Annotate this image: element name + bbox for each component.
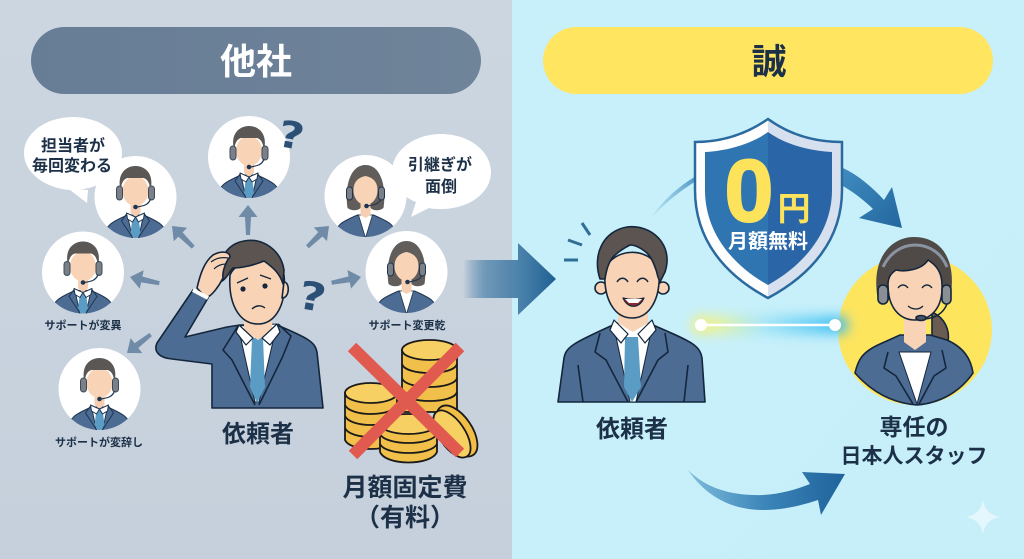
arrow: to upper-right agent	[301, 219, 336, 254]
arrow: to upper-left agent	[165, 219, 200, 254]
icon: joy marks	[564, 223, 590, 260]
label: dedicated Japanese staff	[840, 414, 988, 468]
label: client right: 依頼者	[596, 416, 668, 443]
icon: question mark top: ?	[275, 112, 308, 159]
icon: yellow circle behind staff	[838, 255, 992, 405]
speech bubble: staff changes every time	[24, 117, 122, 203]
panel: Makoto background	[512, 0, 1024, 559]
labels: small agent captions: サポートが変辞し	[55, 435, 143, 449]
arrow: upper right to staff	[843, 168, 902, 228]
icon: shield zero yen	[695, 119, 842, 298]
icon: agent with left bubble	[94, 156, 176, 241]
icon: agent lower left	[58, 348, 140, 433]
speech bubble: staff changes every time: 担当者が	[41, 136, 105, 155]
label: client left: 依頼者	[222, 421, 294, 448]
icon: question mark middle: ?	[295, 273, 329, 322]
speech bubble: handover is a hassle: 面倒	[425, 177, 457, 196]
icon: agent left	[42, 232, 124, 316]
illustration: dedicated staff	[855, 237, 973, 405]
speech bubble: handover is a hassle: 引継ぎが	[408, 155, 472, 174]
arrow: to top agent	[238, 205, 258, 235]
arrow: lower curved to staff	[688, 470, 845, 515]
connection: glowing line	[692, 316, 848, 334]
arrow: upper thin arc	[652, 176, 696, 217]
icon: coin stacks crossed out	[345, 340, 486, 464]
heading: Makoto	[543, 27, 993, 94]
icon: shield zero yen: 0	[725, 141, 773, 240]
speech bubble: staff changes every time: 毎回変わる	[32, 156, 112, 175]
arrow: to right agent	[330, 268, 363, 292]
illustration: worried client	[156, 240, 323, 408]
icon: female agent top right	[324, 155, 406, 240]
icon: sparkle	[966, 500, 1000, 534]
label: monthly fixed fee: 月額固定費	[342, 474, 468, 502]
heading: Makoto: 誠	[751, 43, 787, 82]
label: dedicated Japanese staff: 日本人スタッフ	[840, 445, 988, 468]
arrow: to left agent	[128, 268, 161, 293]
labels: small agent captions: サポート変更乾	[368, 318, 446, 332]
icon: shield zero yen: 円	[778, 190, 810, 227]
arrow: to lower-left agent	[121, 327, 156, 360]
heading: competitors: 他社	[220, 41, 292, 82]
labels: small agent captions	[44, 318, 446, 449]
speech bubble: handover is a hassle	[392, 134, 491, 217]
label: monthly fixed fee: （有料）	[355, 504, 455, 532]
label: monthly fixed fee	[342, 474, 468, 532]
icon: female agent right	[366, 231, 448, 316]
label: dedicated Japanese staff: 専任の	[880, 414, 948, 440]
illustration: happy client	[558, 227, 705, 402]
big transition arrow	[463, 243, 556, 315]
icon: agent top	[208, 116, 290, 201]
heading: competitors	[31, 27, 481, 94]
icon: red cross	[352, 347, 460, 455]
icon: shield zero yen: 月額無料	[728, 230, 808, 253]
panel: competitors background	[0, 0, 512, 559]
labels: small agent captions: サポートが変異	[44, 318, 122, 332]
